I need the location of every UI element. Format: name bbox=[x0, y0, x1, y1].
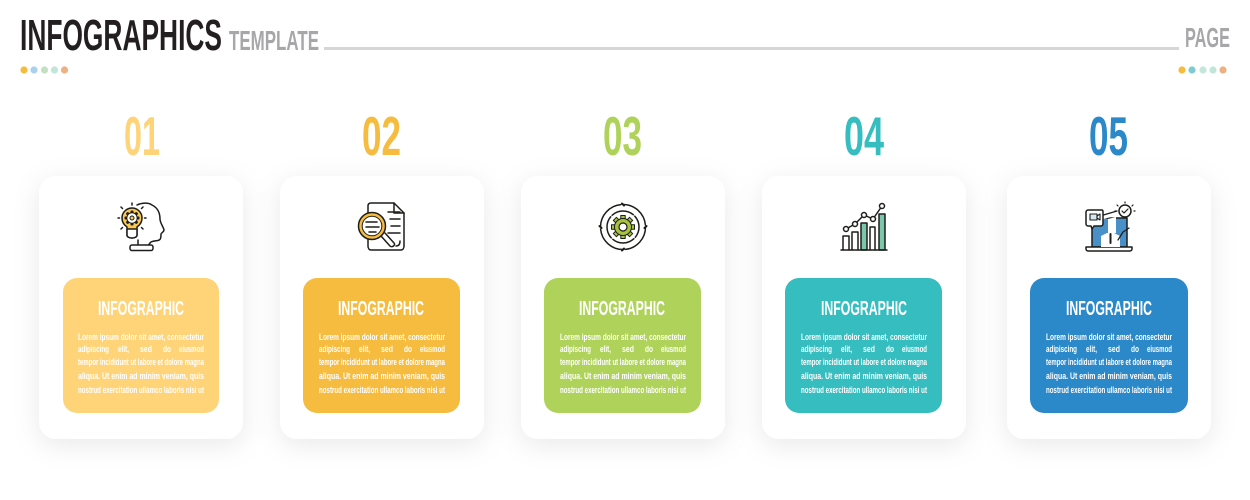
panel body text: do bbox=[645, 344, 653, 354]
panel body text: eiusmod bbox=[902, 344, 927, 354]
panel body text: sed bbox=[381, 344, 393, 354]
icon: head with light bulb bbox=[118, 203, 164, 250]
icon: gear with circular arrows bbox=[600, 204, 646, 250]
panel body text bbox=[801, 332, 927, 395]
panel body text: elit, bbox=[841, 344, 852, 354]
panel body text: tempor incididunt ut labore et dolore magna bbox=[801, 357, 927, 367]
panel body text: aliqua. Ut enim ad minim veniam, quis bbox=[801, 371, 927, 381]
panel body text: nostrud exercitation ullamco laboris nisi ut bbox=[560, 385, 686, 395]
card 4 bbox=[762, 176, 966, 439]
panel 4 bbox=[785, 278, 942, 413]
panel body text: Lorem ipsum dolor sit amet, consectetur bbox=[319, 332, 445, 342]
panel body text: Lorem ipsum dolor sit amet, consectetur bbox=[801, 332, 927, 342]
panel body text: nostrud exercitation ullamco laboris nisi ut bbox=[78, 385, 204, 395]
panel heading: INFOGRAPHIC bbox=[579, 297, 665, 320]
panel body text bbox=[319, 332, 445, 395]
panel 3 bbox=[544, 278, 701, 413]
icon: document with magnifier bbox=[358, 203, 404, 250]
panel body text: do bbox=[1131, 344, 1139, 354]
panel body text: eiusmod bbox=[179, 344, 204, 354]
panel body text: do bbox=[886, 344, 894, 354]
header rule bbox=[324, 47, 1179, 50]
panel body text bbox=[1046, 332, 1172, 395]
panel body text: elit, bbox=[600, 344, 611, 354]
panel heading: INFOGRAPHIC bbox=[338, 297, 424, 320]
number 02: 02 bbox=[362, 105, 401, 167]
panel body text: Lorem ipsum dolor sit amet, consectetur bbox=[560, 332, 686, 342]
card 3 bbox=[521, 176, 725, 439]
number 01: 01 bbox=[124, 105, 160, 167]
panel body text: tempor incididunt ut labore et dolore magna bbox=[78, 357, 204, 367]
panel body text: aliqua. Ut enim ad minim veniam, quis bbox=[319, 371, 445, 381]
panel body text: elit, bbox=[1086, 344, 1097, 354]
panel body text: tempor incididunt ut labore et dolore magna bbox=[319, 357, 445, 367]
panel 1 bbox=[63, 278, 219, 413]
panel body text: nostrud exercitation ullamco laboris nisi ut bbox=[319, 385, 445, 395]
panel body text bbox=[560, 332, 686, 395]
panel body text: do bbox=[163, 344, 171, 354]
panel body text: adipiscing bbox=[560, 344, 591, 354]
right dots bbox=[1178, 66, 1227, 74]
panel body text: elit, bbox=[359, 344, 370, 354]
panel body text: sed bbox=[863, 344, 875, 354]
panel body text: adipiscing bbox=[319, 344, 350, 354]
header subtitle: TEMPLATE bbox=[229, 25, 319, 56]
panel body text: aliqua. Ut enim ad minim veniam, quis bbox=[560, 371, 686, 381]
panel heading: INFOGRAPHIC bbox=[98, 297, 184, 320]
panel 5 bbox=[1030, 278, 1188, 413]
panel 2 bbox=[303, 278, 460, 413]
panel body text: adipiscing bbox=[801, 344, 832, 354]
panel body text: Lorem ipsum dolor sit amet, consectetur bbox=[1046, 332, 1172, 342]
panel body text: eiusmod bbox=[1147, 344, 1172, 354]
panel body text: eiusmod bbox=[420, 344, 445, 354]
panel body text: aliqua. Ut enim ad minim veniam, quis bbox=[78, 371, 204, 381]
panel body text: adipiscing bbox=[78, 344, 109, 354]
icon: presenter on laptop bbox=[1086, 202, 1135, 251]
panel body text: sed bbox=[622, 344, 634, 354]
panel body text: sed bbox=[140, 344, 152, 354]
panel body text: do bbox=[404, 344, 412, 354]
panel body text: nostrud exercitation ullamco laboris nisi ut bbox=[801, 385, 927, 395]
icon: bar and line chart bbox=[841, 204, 887, 250]
left dots bbox=[20, 66, 68, 74]
number 04: 04 bbox=[844, 105, 884, 167]
panel body text: tempor incididunt ut labore et dolore magna bbox=[560, 357, 686, 367]
number 03: 03 bbox=[603, 105, 642, 167]
panel body text: adipiscing bbox=[1046, 344, 1077, 354]
card 5 bbox=[1007, 176, 1211, 439]
panel body text: nostrud exercitation ullamco laboris nisi ut bbox=[1046, 385, 1172, 395]
card 2 bbox=[280, 176, 484, 439]
panel body text: aliqua. Ut enim ad minim veniam, quis bbox=[1046, 371, 1172, 381]
header title: INFOGRAPHICS bbox=[20, 11, 222, 60]
panel body text: elit, bbox=[118, 344, 129, 354]
number 05: 05 bbox=[1089, 105, 1128, 167]
panel heading: INFOGRAPHIC bbox=[821, 297, 907, 320]
card 1 bbox=[39, 176, 243, 439]
panel body text bbox=[78, 332, 204, 395]
panel body text: eiusmod bbox=[661, 344, 686, 354]
panel body text: Lorem ipsum dolor sit amet, consectetur bbox=[78, 332, 204, 342]
panel heading: INFOGRAPHIC bbox=[1066, 297, 1152, 320]
panel body text: tempor incididunt ut labore et dolore magna bbox=[1046, 357, 1172, 367]
panel body text: sed bbox=[1108, 344, 1120, 354]
